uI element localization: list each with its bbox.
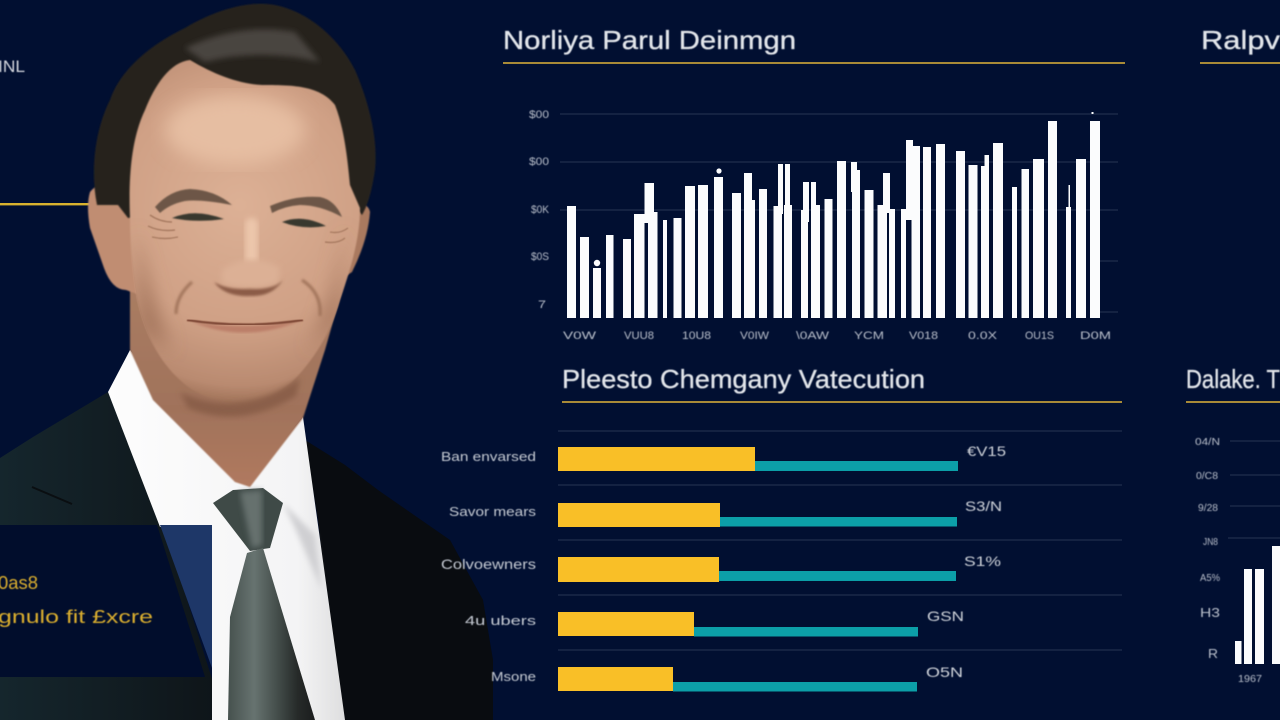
heading: bottom chart: Pleesto Chemgany Vatecution bbox=[562, 364, 925, 394]
right chart y labels: A5% bbox=[1200, 573, 1220, 584]
row 4: 4u ubers bbox=[465, 613, 537, 628]
right chart y labels: JN8 bbox=[1203, 537, 1218, 548]
row 2 bbox=[449, 498, 1002, 527]
columns bbox=[567, 112, 1100, 318]
callout panel bbox=[0, 525, 205, 677]
y axis labels bbox=[529, 109, 550, 311]
row 3: S1% bbox=[964, 553, 1001, 569]
nose bbox=[214, 218, 283, 296]
portrait photo bbox=[0, 4, 493, 720]
y axis labels: $00 bbox=[529, 156, 549, 168]
x axis labels: D0M bbox=[1080, 330, 1111, 342]
right chart y labels: H3 bbox=[1200, 605, 1220, 620]
row 1 bbox=[441, 443, 1006, 471]
right chart y labels: 04/N bbox=[1195, 437, 1220, 448]
row 5 bbox=[491, 664, 963, 692]
right column chart bbox=[1195, 437, 1280, 685]
right chart columns bbox=[1235, 546, 1280, 664]
pocket blue panel bbox=[160, 525, 212, 668]
row 3 bbox=[441, 553, 1001, 582]
x axis labels: V018 bbox=[909, 330, 938, 342]
lapel notch bbox=[32, 487, 72, 504]
right eye bbox=[282, 219, 326, 227]
row 1: Ban envarsed bbox=[441, 449, 536, 464]
stacked bar chart bbox=[441, 431, 1122, 692]
suit jacket right bbox=[305, 440, 493, 720]
x axis labels: VUU8 bbox=[624, 330, 654, 342]
row 1: €V15 bbox=[967, 443, 1006, 459]
eye wrinkles bbox=[148, 215, 348, 242]
row 5: Msone bbox=[491, 669, 536, 684]
right chart y labels: 0/C8 bbox=[1196, 471, 1218, 482]
face bbox=[130, 60, 360, 405]
right brow bbox=[270, 197, 342, 217]
left ear bbox=[88, 187, 140, 295]
row 3: Colvoewners bbox=[441, 556, 536, 572]
right ear bbox=[340, 200, 370, 280]
right chart y labels: 9/28 bbox=[1198, 503, 1218, 514]
left brow bbox=[155, 189, 232, 213]
x axis labels bbox=[563, 330, 1111, 342]
callout text line 2: gnulo fit £xcre bbox=[0, 607, 153, 627]
shirt and collar bbox=[108, 350, 345, 720]
right chart grid bbox=[1228, 441, 1280, 538]
cheek shadow bbox=[134, 254, 345, 344]
y axis labels: $0K bbox=[531, 204, 550, 216]
x axis labels: \0AW bbox=[796, 330, 830, 342]
heading: top right chart: Ralpv bbox=[1201, 25, 1280, 55]
row 2: Savor mears bbox=[449, 504, 537, 519]
right chart y labels: R bbox=[1208, 646, 1218, 661]
row 4: GSN bbox=[927, 608, 964, 624]
accent line left bbox=[0, 203, 90, 205]
x axis labels: 10U8 bbox=[682, 330, 711, 342]
y axis labels: $00 bbox=[529, 109, 549, 121]
y axis labels: $0S bbox=[531, 251, 549, 263]
tie bbox=[213, 488, 315, 720]
chart grid bbox=[560, 114, 1118, 312]
x axis labels: OU1S bbox=[1025, 330, 1054, 342]
left eye bbox=[172, 213, 224, 221]
x axis labels: V0W bbox=[563, 330, 597, 342]
row 2: S3/N bbox=[965, 498, 1002, 514]
x axis labels: YCM bbox=[854, 330, 884, 342]
heading: top chart: Norliya Parul Deinmgn bbox=[503, 25, 796, 55]
cheek folds bbox=[176, 280, 320, 316]
chin shadow bbox=[180, 378, 300, 417]
row 5: O5N bbox=[926, 664, 963, 680]
hair highlights bbox=[185, 29, 320, 62]
x axis labels: V0IW bbox=[740, 330, 770, 342]
hair bbox=[94, 4, 376, 218]
row separators bbox=[558, 431, 1122, 650]
collar fold shadow bbox=[283, 503, 322, 590]
row 4 bbox=[465, 608, 964, 636]
right chart y labels bbox=[1195, 437, 1220, 661]
neck bbox=[130, 290, 342, 487]
forehead highlight bbox=[165, 95, 305, 165]
right chart x label: 1967 bbox=[1238, 674, 1262, 685]
suit jacket left bbox=[0, 392, 225, 720]
column chart bbox=[529, 109, 1118, 342]
x axis labels: 0.0X bbox=[968, 330, 998, 342]
mouth bbox=[187, 320, 303, 333]
y axis labels: 7 bbox=[538, 299, 546, 311]
